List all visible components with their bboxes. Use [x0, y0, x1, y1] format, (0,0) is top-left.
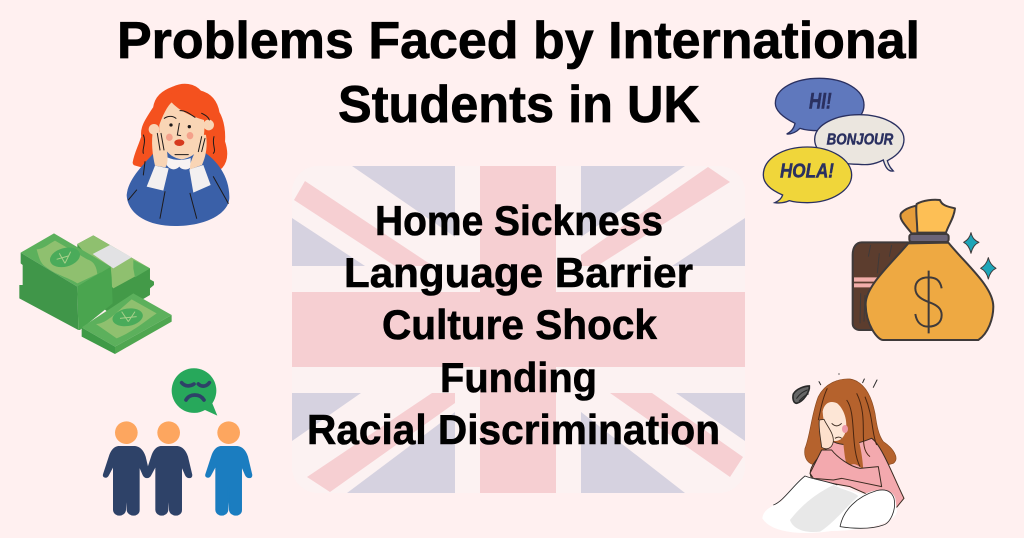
flag background: [292, 166, 745, 493]
icon: speech bubbles: BONJOUR: [827, 132, 893, 149]
icon: stack of money: [19, 233, 172, 354]
list of problems: Funding: [440, 354, 597, 401]
list of problems: Home Sickness: [375, 197, 663, 244]
icon: money bag and wallet: [853, 200, 996, 340]
title: Students in UK: [338, 76, 700, 134]
list of problems: Language Barrier: [344, 249, 693, 296]
list of problems: Racial Discrimination: [307, 406, 720, 453]
title: [117, 12, 920, 134]
icon: sad speech bubble: [172, 368, 217, 416]
icon: speech bubbles: HOLA!: [780, 159, 834, 182]
icon: speech bubbles: HI!: [809, 88, 832, 113]
icon: sad girl in bed: [763, 373, 904, 533]
icon: worried woman: [127, 87, 229, 226]
list of problems: [307, 197, 720, 453]
icon: excluded people: [104, 368, 252, 515]
icon: speech bubbles: [763, 78, 904, 203]
list of problems: Culture Shock: [382, 301, 658, 348]
title: Problems Faced by International: [117, 12, 920, 70]
